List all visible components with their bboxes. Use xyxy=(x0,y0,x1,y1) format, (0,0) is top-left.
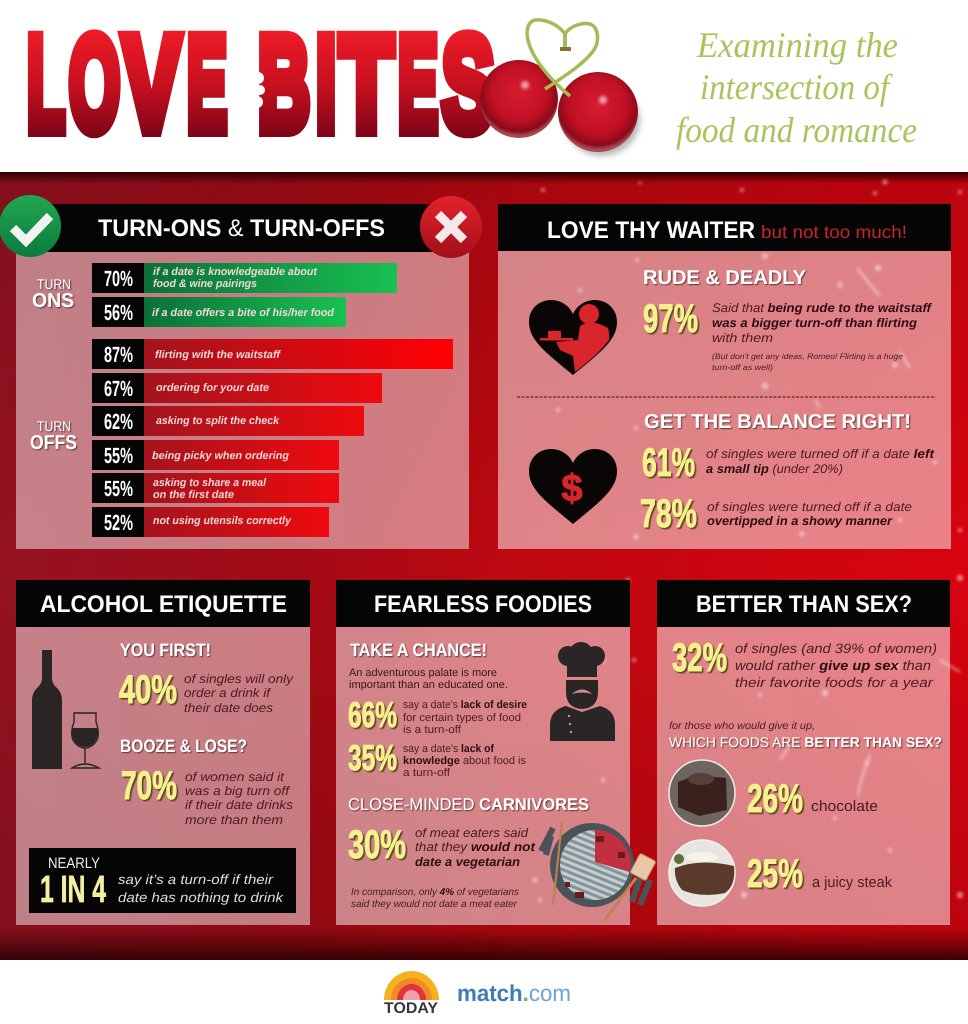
logo: match.com: match.com xyxy=(457,980,571,1006)
text: lack of knowledge: say a date's lack of xyxy=(403,743,494,755)
bar: 62% turn-off xyxy=(92,406,364,436)
bar: 62% turn-off: 62% xyxy=(104,409,133,434)
stat: 61%: 61% xyxy=(642,441,695,485)
panel: turn-ons and turn-offs xyxy=(0,195,482,549)
bar: 87% turn-off: flirting with the waitstaff xyxy=(155,349,281,361)
bar: 55% turn-off, meal: 55% xyxy=(104,476,133,501)
text: rude to waitstaff xyxy=(712,301,933,372)
panel: love thy waiter xyxy=(498,204,951,549)
title: LOVE BITES xyxy=(27,10,494,159)
stat: 97%: 97% xyxy=(643,297,698,341)
bar: 52% turn-off: 52% xyxy=(104,510,133,535)
text: order a drink: of singles will only xyxy=(184,672,294,686)
background: red textured band xyxy=(0,172,968,960)
heading bar xyxy=(657,580,950,627)
bar: 55% turn-off: being picky when ordering xyxy=(152,450,289,462)
stat: 66%: 66% xyxy=(348,694,397,735)
text: meat eaters: that they would not xyxy=(415,840,536,854)
text: rude to waitstaff: Said that being rude to the waitstaff xyxy=(712,301,933,315)
heading: take a chance: TAKE A CHANCE! xyxy=(350,640,487,660)
text: lack of knowledge: knowledge about food is xyxy=(403,755,526,767)
text: give up sex xyxy=(735,641,937,690)
panel: alcohol etiquette xyxy=(16,580,310,925)
text: chocolate: chocolate xyxy=(811,798,878,815)
bar: 52% turn-off: not using utensils correctly xyxy=(153,515,292,527)
bar: 87% turn-off: 87% xyxy=(104,342,133,367)
bar: 87% turn-off xyxy=(92,339,453,369)
bar: 70% turn-on xyxy=(92,263,397,293)
label: turn ons: ONS xyxy=(32,290,74,312)
heading bar xyxy=(30,204,450,252)
label: turn ons xyxy=(32,276,74,312)
bar: 70% turn-on: food & wine pairings xyxy=(153,278,257,290)
icon: chocolate photo xyxy=(669,760,735,826)
stat: 40%: 40% xyxy=(119,668,177,712)
text: small tip: of singles were turned off if a date left xyxy=(706,447,935,461)
icon: grill with utensils xyxy=(541,822,656,920)
heading bar: FEARLESS FOODIES xyxy=(374,591,592,618)
bar: 55% turn-off xyxy=(92,440,339,470)
heading: which foods: WHICH FOODS ARE BETTER THAN SEX? xyxy=(669,734,942,750)
text: give up sex: would rather give up sex than xyxy=(735,658,931,673)
heading bar: BETTER THAN SEX? xyxy=(696,591,912,618)
text: comparison note: In comparison, only 4% of vegetarians xyxy=(351,887,519,898)
text: drinks more: was a big turn off xyxy=(185,784,291,798)
text: drinks more xyxy=(185,770,293,827)
text: lack of desire: say a date's lack of desire xyxy=(403,699,527,711)
text: rude to waitstaff: was a bigger turn-off than flirting xyxy=(712,316,917,330)
callout: nearly 1 in 4 xyxy=(29,848,296,913)
stat: 78%: 78% xyxy=(640,492,697,536)
text: drinks more: of women said it xyxy=(185,770,285,784)
title: LOVE BITES: L xyxy=(27,10,65,159)
text: give up sex: of singles (and 39% of women) xyxy=(735,641,937,656)
text: overtipped xyxy=(707,500,912,528)
text: lack of desire xyxy=(403,699,527,736)
heading bar: LOVE THY WAITER xyxy=(547,217,755,244)
bar: 67% turn-off: ordering for your date xyxy=(156,382,269,394)
text: meat eaters xyxy=(415,826,536,869)
title: LOVE BITES: S xyxy=(442,10,494,159)
text: lack of knowledge: a turn-off xyxy=(403,767,451,779)
text: overtipped: of singles were turned off if a date xyxy=(707,500,912,514)
callout: nearly 1 in 4: NEARLY xyxy=(48,855,100,872)
heading bar xyxy=(336,580,630,627)
heading bar: ALCOHOL ETIQUETTE xyxy=(40,591,287,618)
text: comparison note xyxy=(351,887,519,910)
text: adventurous palate: An adventurous palate is more xyxy=(349,667,497,679)
bar: 55% turn-off, meal: asking to share a meal xyxy=(153,477,267,489)
title: LOVE BITES: V xyxy=(123,10,180,159)
bar: 67% turn-off xyxy=(92,373,382,403)
text: meat eaters: date a vegetarian xyxy=(415,855,520,869)
stat: 35%: 35% xyxy=(348,737,397,778)
stat: 70%: 70% xyxy=(121,764,177,808)
logo: TODAY rainbow xyxy=(384,971,439,1017)
label: turn offs xyxy=(30,418,77,454)
label: turn ons: TURN xyxy=(37,276,71,292)
title: LOVE BITES: T xyxy=(340,10,393,159)
text: give up sex: their favorite foods for a year xyxy=(735,675,934,690)
stat: 26%: 26% xyxy=(747,777,803,821)
text: order a drink: order a drink if xyxy=(184,686,272,700)
text: adventurous palate: important than an educated one. xyxy=(349,679,508,691)
stat: 30%: 30% xyxy=(348,823,406,867)
tagline: intersection of xyxy=(700,67,894,107)
heading bar xyxy=(16,580,310,627)
text: meat eaters: of meat eaters said xyxy=(415,826,529,840)
text: rude to waitstaff: (But don't get any ideas, Romeo! Flirting is a huge xyxy=(712,352,904,361)
text: adventurous palate xyxy=(349,667,508,691)
text: for those who would give it up: for those who would give it up, xyxy=(669,720,815,732)
logo: TODAY rainbow: TODAY xyxy=(384,1000,439,1017)
text: a juicy steak: a juicy steak xyxy=(812,874,892,891)
title: LOVE BITES: I xyxy=(316,10,336,159)
text: drinks more: more than them xyxy=(185,813,283,827)
heading: close-minded carnivores: CLOSE-MINDED CARNIVORES xyxy=(348,795,589,814)
heading: rude and deadly: RUDE & DEADLY xyxy=(643,267,807,289)
text: drinks more: if their date drinks xyxy=(185,798,293,812)
bar: 55% turn-off, meal xyxy=(92,473,339,503)
icon: red cross xyxy=(420,196,482,258)
bar: 70% turn-on: 70% xyxy=(104,266,133,291)
stat: 32%: 32% xyxy=(672,636,727,680)
text: lack of desire: for certain types of food xyxy=(403,712,521,724)
bar: 52% turn-off xyxy=(92,507,329,537)
icon: wine glass xyxy=(72,713,99,768)
bar: 70% turn-on: if a date is knowledgeable about xyxy=(153,266,318,278)
text: order a drink: their date does xyxy=(184,701,273,715)
title: LOVE BITES: E xyxy=(187,10,227,159)
heading: get the balance right: GET THE BALANCE RIGHT! xyxy=(644,411,911,433)
bar: 62% turn-off: asking to split the check xyxy=(156,415,280,427)
bar: 56% turn-on: if a date offers a bite of his/her food xyxy=(152,307,334,319)
icon: dollar heart: $ xyxy=(561,468,583,510)
callout: nearly 1 in 4: 1 IN 4 xyxy=(40,869,106,911)
bar: 67% turn-off: 67% xyxy=(104,376,133,401)
title: LOVE BITES: B xyxy=(258,10,310,159)
title: LOVE BITES: E xyxy=(398,10,438,159)
panel: fearless foodies xyxy=(336,580,656,925)
heading: booze and lose: BOOZE & LOSE? xyxy=(120,736,247,756)
icon: cherries with heart stems xyxy=(480,20,640,156)
bar: 56% turn-on xyxy=(92,297,346,327)
bar: 56% turn-on: 56% xyxy=(104,300,133,325)
heading bar xyxy=(498,204,951,251)
tagline: food and romance xyxy=(676,110,917,150)
tagline: Examining the xyxy=(696,25,898,65)
stat: 25%: 25% xyxy=(747,852,803,896)
label: turn offs: OFFS xyxy=(30,432,77,454)
icon: steak photo xyxy=(669,840,735,906)
heading: you first: YOU FIRST! xyxy=(120,640,211,660)
icon: dollar heart xyxy=(529,449,617,524)
label: turn offs: TURN xyxy=(37,418,71,434)
text: order a drink xyxy=(184,672,294,715)
callout: nearly 1 in 4: date has nothing to drink xyxy=(118,890,284,905)
text: comparison note: said they would not date a meat eater xyxy=(351,899,518,910)
heading bar: but not too much! xyxy=(761,222,907,242)
divider: dashed line xyxy=(517,396,936,398)
text: small tip xyxy=(706,447,935,476)
title: LOVE BITES: O xyxy=(69,10,120,159)
text: lack of desire: is a turn-off xyxy=(403,724,462,736)
text: overtipped: overtipped in a showy manner xyxy=(707,514,893,528)
text: lack of knowledge xyxy=(403,743,526,779)
text: rude to waitstaff: with them xyxy=(712,331,773,345)
icon: green check xyxy=(0,195,61,257)
bar: 55% turn-off: 55% xyxy=(104,443,133,468)
tagline xyxy=(676,25,917,150)
text: rude to waitstaff: turn-off as well) xyxy=(712,363,773,372)
callout: nearly 1 in 4: say it’s a turn-off if their xyxy=(118,872,274,887)
icon: wine bottle xyxy=(32,650,62,769)
bar: 55% turn-off, meal: on the first date xyxy=(153,489,234,501)
icon: chef xyxy=(550,642,615,741)
panel: better than sex xyxy=(657,580,950,925)
heading bar: TURN-ONS & TURN-OFFS xyxy=(98,215,385,242)
text: small tip: a small tip (under 20%) xyxy=(706,462,843,476)
icon: waiter heart xyxy=(529,300,617,375)
